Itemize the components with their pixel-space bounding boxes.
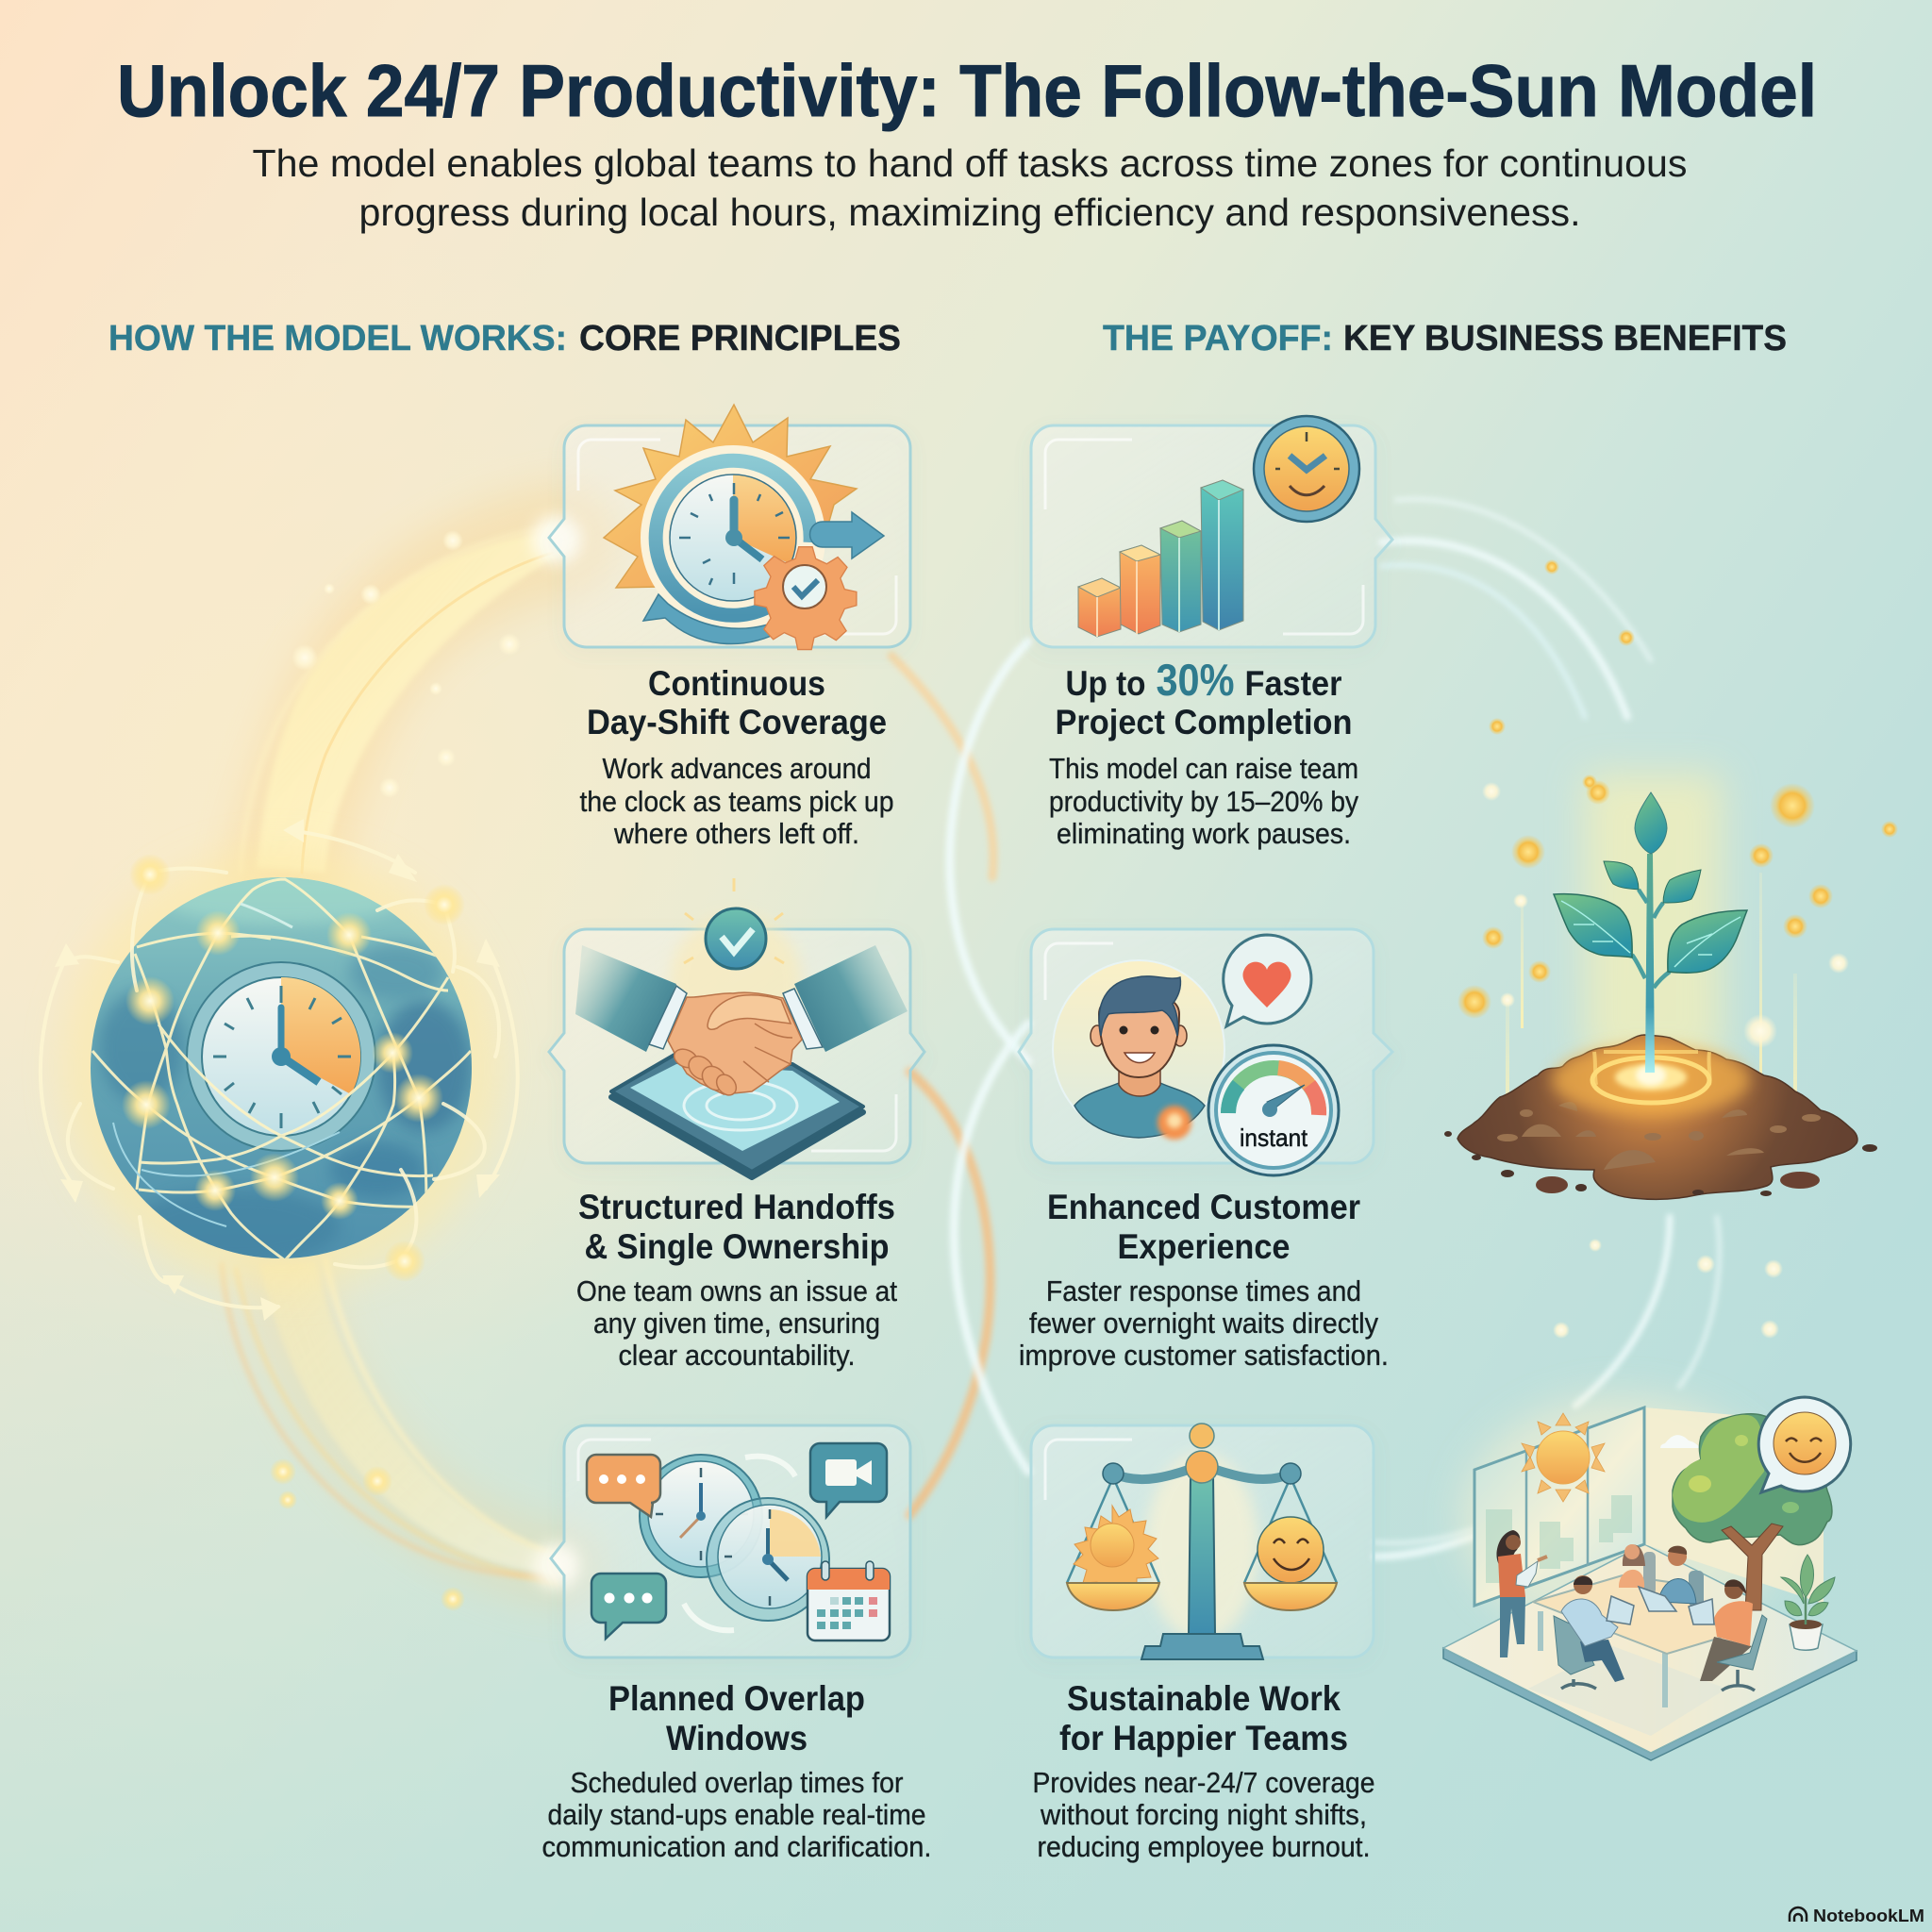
back walls and windows bbox=[1474, 1407, 1824, 1606]
network lines bbox=[92, 879, 471, 1260]
text: enhanced customer experience: improve customer satisfaction. bbox=[1019, 1339, 1389, 1372]
glass panel bbox=[551, 1425, 910, 1657]
glass panel bbox=[1019, 929, 1392, 1163]
standing presenter bbox=[1496, 1530, 1547, 1657]
clock A bbox=[640, 1455, 762, 1577]
clock B bbox=[707, 1498, 829, 1621]
glass panel bbox=[549, 929, 924, 1163]
card: planned overlap windows bbox=[551, 1425, 910, 1657]
icon: overlapping clocks and chats bbox=[587, 1443, 890, 1641]
text: faster project completion: productivity by 15–20% by bbox=[1049, 785, 1358, 818]
text: sustainable work: Provides near-24/7 coverage bbox=[1032, 1766, 1375, 1799]
icon: heart speech bubble bbox=[1224, 935, 1311, 1026]
hands bbox=[668, 992, 802, 1099]
text: structured handoffs: & Single Ownership bbox=[585, 1227, 889, 1266]
text: sustainable work: for Happier Teams bbox=[1059, 1719, 1348, 1757]
text: sustainable work: Sustainable Work bbox=[1067, 1679, 1341, 1718]
icon: handshake over tablet bbox=[575, 878, 908, 1177]
scattered particles left bbox=[270, 530, 521, 1611]
text: continuous day-shift coverage: the clock as teams pick up bbox=[579, 785, 894, 818]
heading: core principles bbox=[108, 319, 901, 358]
seedling bbox=[1554, 792, 1747, 1073]
glass panel bbox=[549, 425, 910, 647]
golden flow arcs: from globe to principle cards bbox=[222, 515, 993, 1589]
green chat bbox=[591, 1574, 666, 1639]
tablet bbox=[611, 1055, 863, 1177]
text: planned overlap windows bbox=[541, 1679, 932, 1863]
heading: core principles: CORE PRINCIPLES bbox=[579, 319, 901, 358]
text: faster project completion bbox=[1049, 655, 1358, 850]
text: structured handoffs: clear accountability. bbox=[619, 1339, 855, 1372]
text: faster project completion: Up to bbox=[1066, 664, 1145, 703]
smile speech bubble bbox=[1758, 1397, 1851, 1492]
text: faster project completion: Project Completion bbox=[1055, 703, 1353, 741]
text: continuous day-shift coverage bbox=[579, 664, 894, 850]
text: planned overlap windows: daily stand-ups enable real-time bbox=[547, 1798, 926, 1831]
calendar bbox=[808, 1561, 890, 1641]
text: planned overlap windows: communication and clarification. bbox=[541, 1830, 932, 1863]
orange chat bbox=[587, 1455, 660, 1517]
icon: happy team office bbox=[1443, 1396, 1857, 1760]
text: faster project completion: eliminating work pauses. bbox=[1057, 817, 1351, 850]
sun in left pan bbox=[1074, 1506, 1158, 1600]
smiley in right pan bbox=[1257, 1517, 1324, 1583]
subtitle: The model enables global teams to hand off tasks across time zones for continuous bbox=[253, 142, 1687, 185]
heading: core principles: HOW THE MODEL WORKS: bbox=[108, 319, 567, 358]
soil mound bbox=[1444, 1035, 1877, 1199]
text: continuous day-shift coverage: Continuous bbox=[648, 664, 825, 703]
glass panel bbox=[1031, 1425, 1374, 1657]
light blue flow arcs: from benefit cards bbox=[950, 499, 1720, 1557]
icon: balance scale bbox=[1067, 1424, 1337, 1659]
clock in globe bbox=[187, 962, 375, 1151]
icon: globe with clock and network bbox=[41, 819, 518, 1321]
card: enhanced customer experience bbox=[1019, 929, 1392, 1175]
text: structured handoffs: One team owns an issue at bbox=[576, 1274, 897, 1307]
card: sustainable work bbox=[1031, 1424, 1374, 1659]
text: planned overlap windows: Planned Overlap bbox=[608, 1679, 865, 1718]
network glow nodes bbox=[122, 854, 465, 1282]
text: faster project completion: 30% bbox=[1157, 655, 1234, 705]
icon: glowing seedling in soil bbox=[1444, 559, 1898, 1339]
text: structured handoffs: Structured Handoffs bbox=[578, 1188, 895, 1226]
light beam bbox=[1585, 774, 1722, 1066]
text: faster project completion: This model can raise team bbox=[1049, 752, 1358, 785]
light streaks and particles bbox=[1457, 559, 1898, 1339]
sun bbox=[1522, 1413, 1605, 1502]
icon: instant gauge bbox=[1208, 1045, 1339, 1175]
seated colleague back bbox=[1619, 1544, 1656, 1594]
seated man left bbox=[1554, 1575, 1624, 1689]
video chat bbox=[810, 1443, 887, 1517]
check badge bbox=[706, 908, 766, 969]
icon: sun clock gear bbox=[604, 405, 884, 650]
text: faster project completion: Faster bbox=[1245, 664, 1341, 703]
text: structured handoffs: any given time, ensuring bbox=[593, 1307, 880, 1340]
icon: happy customer bbox=[1053, 960, 1224, 1140]
potted plant bbox=[1781, 1555, 1835, 1650]
text: enhanced customer experience: Faster response times and bbox=[1046, 1274, 1361, 1307]
watermark: NotebookLM: NotebookLM bbox=[1813, 1907, 1924, 1925]
heading: key business benefits: THE PAYOFF: bbox=[1103, 319, 1333, 358]
subtitle: progress during local hours, maximizing efficiency and responsiveness. bbox=[358, 191, 1581, 234]
text: enhanced customer experience: Enhanced Customer bbox=[1047, 1188, 1360, 1226]
text: planned overlap windows: Windows bbox=[666, 1719, 808, 1757]
title: Unlock 24/7 Productivity: The Follow-the-Sun Model bbox=[117, 49, 1817, 132]
text: structured handoffs bbox=[576, 1188, 897, 1372]
platform bbox=[1443, 1544, 1857, 1760]
card: continuous day-shift coverage bbox=[549, 405, 910, 650]
text: continuous day-shift coverage: Work advances around bbox=[602, 752, 872, 785]
text: sustainable work: reducing employee burnout. bbox=[1038, 1830, 1370, 1863]
tree bbox=[1673, 1414, 1832, 1610]
text: enhanced customer experience bbox=[1019, 1188, 1389, 1372]
text: continuous day-shift coverage: Day-Shift Coverage bbox=[587, 703, 887, 741]
text: continuous day-shift coverage: where others left off. bbox=[613, 817, 859, 850]
text: enhanced customer experience: Experience bbox=[1117, 1227, 1291, 1266]
seated colleague bearded bbox=[1658, 1546, 1704, 1607]
heading: key business benefits bbox=[1103, 319, 1787, 358]
text: enhanced customer experience: fewer overnight waits directly bbox=[1029, 1307, 1378, 1340]
text: sustainable work: without forcing night shifts, bbox=[1040, 1798, 1367, 1831]
text: sustainable work bbox=[1032, 1679, 1375, 1863]
text: planned overlap windows: Scheduled overlap times for bbox=[570, 1766, 904, 1799]
seated man right bbox=[1700, 1579, 1767, 1690]
table bbox=[1533, 1575, 1724, 1707]
orbit arrows bbox=[41, 819, 518, 1321]
team members bbox=[1496, 1530, 1767, 1690]
laptops bbox=[1607, 1587, 1714, 1624]
card: faster project completion bbox=[1031, 416, 1392, 647]
icon: smiling clock bbox=[1254, 416, 1359, 522]
subtitle bbox=[253, 142, 1687, 234]
gear bbox=[755, 547, 857, 650]
icon: instant gauge: instant bbox=[1240, 1124, 1308, 1152]
card: structured handoffs bbox=[549, 878, 924, 1177]
icon: rising bars bbox=[1078, 480, 1243, 637]
sleeves and cuffs bbox=[575, 945, 676, 1052]
heading: key business benefits: KEY BUSINESS BENEFITS bbox=[1343, 319, 1787, 358]
glass panel bbox=[1031, 425, 1392, 647]
